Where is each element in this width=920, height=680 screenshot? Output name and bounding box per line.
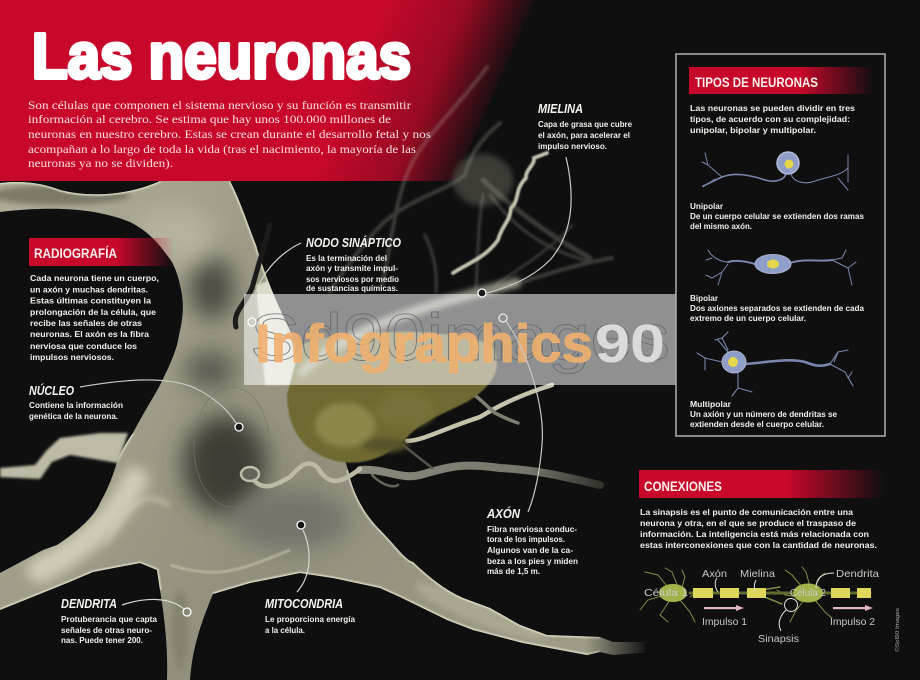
panel: tipos de neuronas: Bipolar	[690, 293, 719, 303]
callout: mielina: Capa de grasa que cubre	[538, 119, 632, 129]
callout: nodo sináptico: NODO SINÁPTICO	[306, 235, 401, 250]
icon: bipolar neuron	[706, 250, 856, 285]
panel: tipos de neuronas: Unipolar	[690, 201, 724, 211]
dendrite tip fade	[588, 636, 645, 655]
callout: mielina: impulso nervioso.	[538, 141, 607, 151]
callout: axón: Fibra nerviosa conduc-	[487, 524, 577, 534]
callout: axón: Algunos van de la ca-	[487, 545, 573, 555]
callout: dendrita: DENDRITA	[61, 597, 117, 611]
lower axon and branches	[241, 385, 600, 486]
synapse diagram: Sinapsis	[758, 633, 799, 645]
callout: mitocondria	[265, 521, 355, 635]
intro text: información al cerebro. Se estima que hay unos 100.000 millones de	[28, 113, 391, 126]
callout: axón: beza a los pies y miden	[487, 556, 578, 566]
panel: tipos de neuronas: Un axión y un número de dendritas se	[690, 409, 837, 419]
panel: conexiones: neurona y otra, en el que se produce el traspaso de	[640, 518, 856, 528]
callout: mitocondria: a la célula.	[265, 625, 305, 635]
myelin wavy fiber	[453, 153, 547, 273]
panel: tipos de neuronas	[676, 54, 885, 436]
faint background neuron with myelin	[330, 67, 612, 292]
panel: tipos de neuronas: Las neuronas se pueden dividir en tres	[690, 103, 855, 113]
panel: radiografía	[29, 238, 174, 362]
panel: conexiones: información. La inteligencia está más relacionada con	[640, 529, 869, 539]
synapse diagram: Axón	[702, 568, 727, 580]
olive mass highlights	[315, 392, 435, 452]
watermark: Sd90images	[250, 300, 670, 374]
watermark	[244, 294, 676, 385]
panel: tipos de neuronas: extremo de un cuerpo celular.	[690, 313, 806, 323]
panel: conexiones: La sinapsis es el punto de comunicación entre una	[640, 507, 853, 517]
callout: mielina	[478, 102, 632, 297]
callout: nodo sináptico: de sustancias químicas.	[306, 283, 398, 293]
callout: mielina: el axón, para acelerar el	[538, 130, 630, 140]
panel: radiografía: recibe las señales de otras	[30, 318, 142, 328]
panel: radiografía: impulsos nerviosos.	[30, 352, 114, 362]
copyright: ©Sol90 Images	[894, 608, 901, 652]
callout: nodo sináptico: axón y transmite impul-	[306, 263, 398, 273]
panel: tipos de neuronas: Multipolar	[690, 399, 732, 409]
intro text: acompañan a lo largo de toda la vida (tras el nacimiento, la mayoría de las	[28, 143, 416, 156]
panel: radiografía: Cada neurona tiene un cuerpo,	[30, 273, 159, 283]
synapse diagram: Célula 2	[790, 587, 826, 599]
panel: tipos de neuronas: De un cuerpo celular se extienden dos ramas	[690, 211, 864, 221]
callout: núcleo: genética de la neurona.	[29, 411, 118, 421]
callout: axón: más de 1,5 m.	[487, 566, 540, 576]
panel: radiografía: un axón y muchas dendritas.	[30, 284, 148, 294]
synapse diagram: Impulso 1	[702, 616, 747, 628]
olive cell mass	[287, 332, 497, 463]
callout: mitocondria: Le proporciona energía	[265, 614, 355, 624]
callout: núcleo: Contiene la información	[29, 400, 123, 410]
icon: unipolar neuron	[702, 152, 848, 190]
callout: dendrita	[61, 597, 191, 645]
panel: tipos de neuronas: Dos axiones separados se extienden de cada	[690, 303, 864, 313]
panel: conexiones: CONEXIONES	[644, 479, 722, 494]
callout: axón: tora de los impulsos.	[487, 534, 565, 544]
callout: mitocondria: MITOCONDRIA	[265, 597, 343, 611]
callout: núcleo	[29, 380, 243, 431]
bright branch	[407, 385, 552, 441]
callout: nodo sináptico: sos nerviosos por medio	[306, 274, 399, 284]
synapse diagram: Mielina	[740, 568, 775, 580]
panel: radiografía: prolongación de la célula, que	[30, 307, 156, 317]
watermark: 90	[595, 314, 665, 374]
panel: conexiones: estas interconexiones que con la cantidad de neuronas.	[640, 540, 877, 550]
callout: núcleo: NÚCLEO	[29, 383, 74, 398]
synaptic axon (dark tube)	[235, 225, 270, 327]
panel: tipos de neuronas: del mismo axón.	[690, 221, 752, 231]
callout: dendrita: señales de otras neuro-	[61, 625, 152, 635]
callout: axón	[486, 314, 578, 576]
synapse diagram: Célula 1	[644, 587, 688, 599]
nucleus ring	[194, 387, 270, 507]
panel: conexiones	[639, 470, 884, 645]
panel: radiografía: neuronas. El axón es la fibra	[30, 329, 149, 339]
icon: multipolar neuron	[697, 332, 853, 396]
red title panel	[0, 0, 535, 181]
callout: nodo sináptico	[248, 235, 401, 326]
intro text: neuronas ya no se dividen).	[28, 157, 173, 170]
callout: axón: AXÓN	[486, 506, 521, 521]
callout: mielina: MIELINA	[538, 102, 583, 116]
synapse diagram	[640, 567, 879, 645]
panel: tipos de neuronas: TIPOS DE NEURONAS	[695, 75, 818, 90]
intro text: Son células que componen el sistema nervioso y su función es transmitir	[28, 99, 411, 112]
watermark: Infographics	[255, 314, 593, 374]
synapse diagram: Dendrita	[836, 568, 879, 580]
thin left dendrite	[0, 433, 128, 479]
panel: radiografía: RADIOGRAFÍA	[34, 246, 117, 261]
panel: radiografía: Estas últimas constituyen la	[30, 296, 151, 306]
callout: nodo sináptico: Es la terminación del	[306, 253, 387, 263]
intro text	[28, 99, 432, 170]
panel: radiografía: nerviosa que conduce los	[30, 341, 137, 351]
synapse diagram: Impulso 2	[830, 616, 875, 628]
intro text: neuronas en nuestro cerebro. Estas se crean durante el desarrollo fetal y nos	[28, 128, 432, 141]
title: Las neuronas	[32, 20, 411, 92]
callout: dendrita: Protuberancia que capta	[61, 614, 157, 624]
panel: tipos de neuronas: unipolar, bipolar y multipolar.	[690, 125, 816, 135]
neuron body	[0, 170, 660, 680]
light branch crossing the watermark	[300, 282, 520, 375]
callout: dendrita: nas. Puede tener 200.	[61, 635, 143, 645]
panel: tipos de neuronas: tipos, de acuerdo con su complejidad:	[690, 114, 850, 124]
panel: tipos de neuronas: extienden desde el cuerpo celular.	[690, 419, 824, 429]
